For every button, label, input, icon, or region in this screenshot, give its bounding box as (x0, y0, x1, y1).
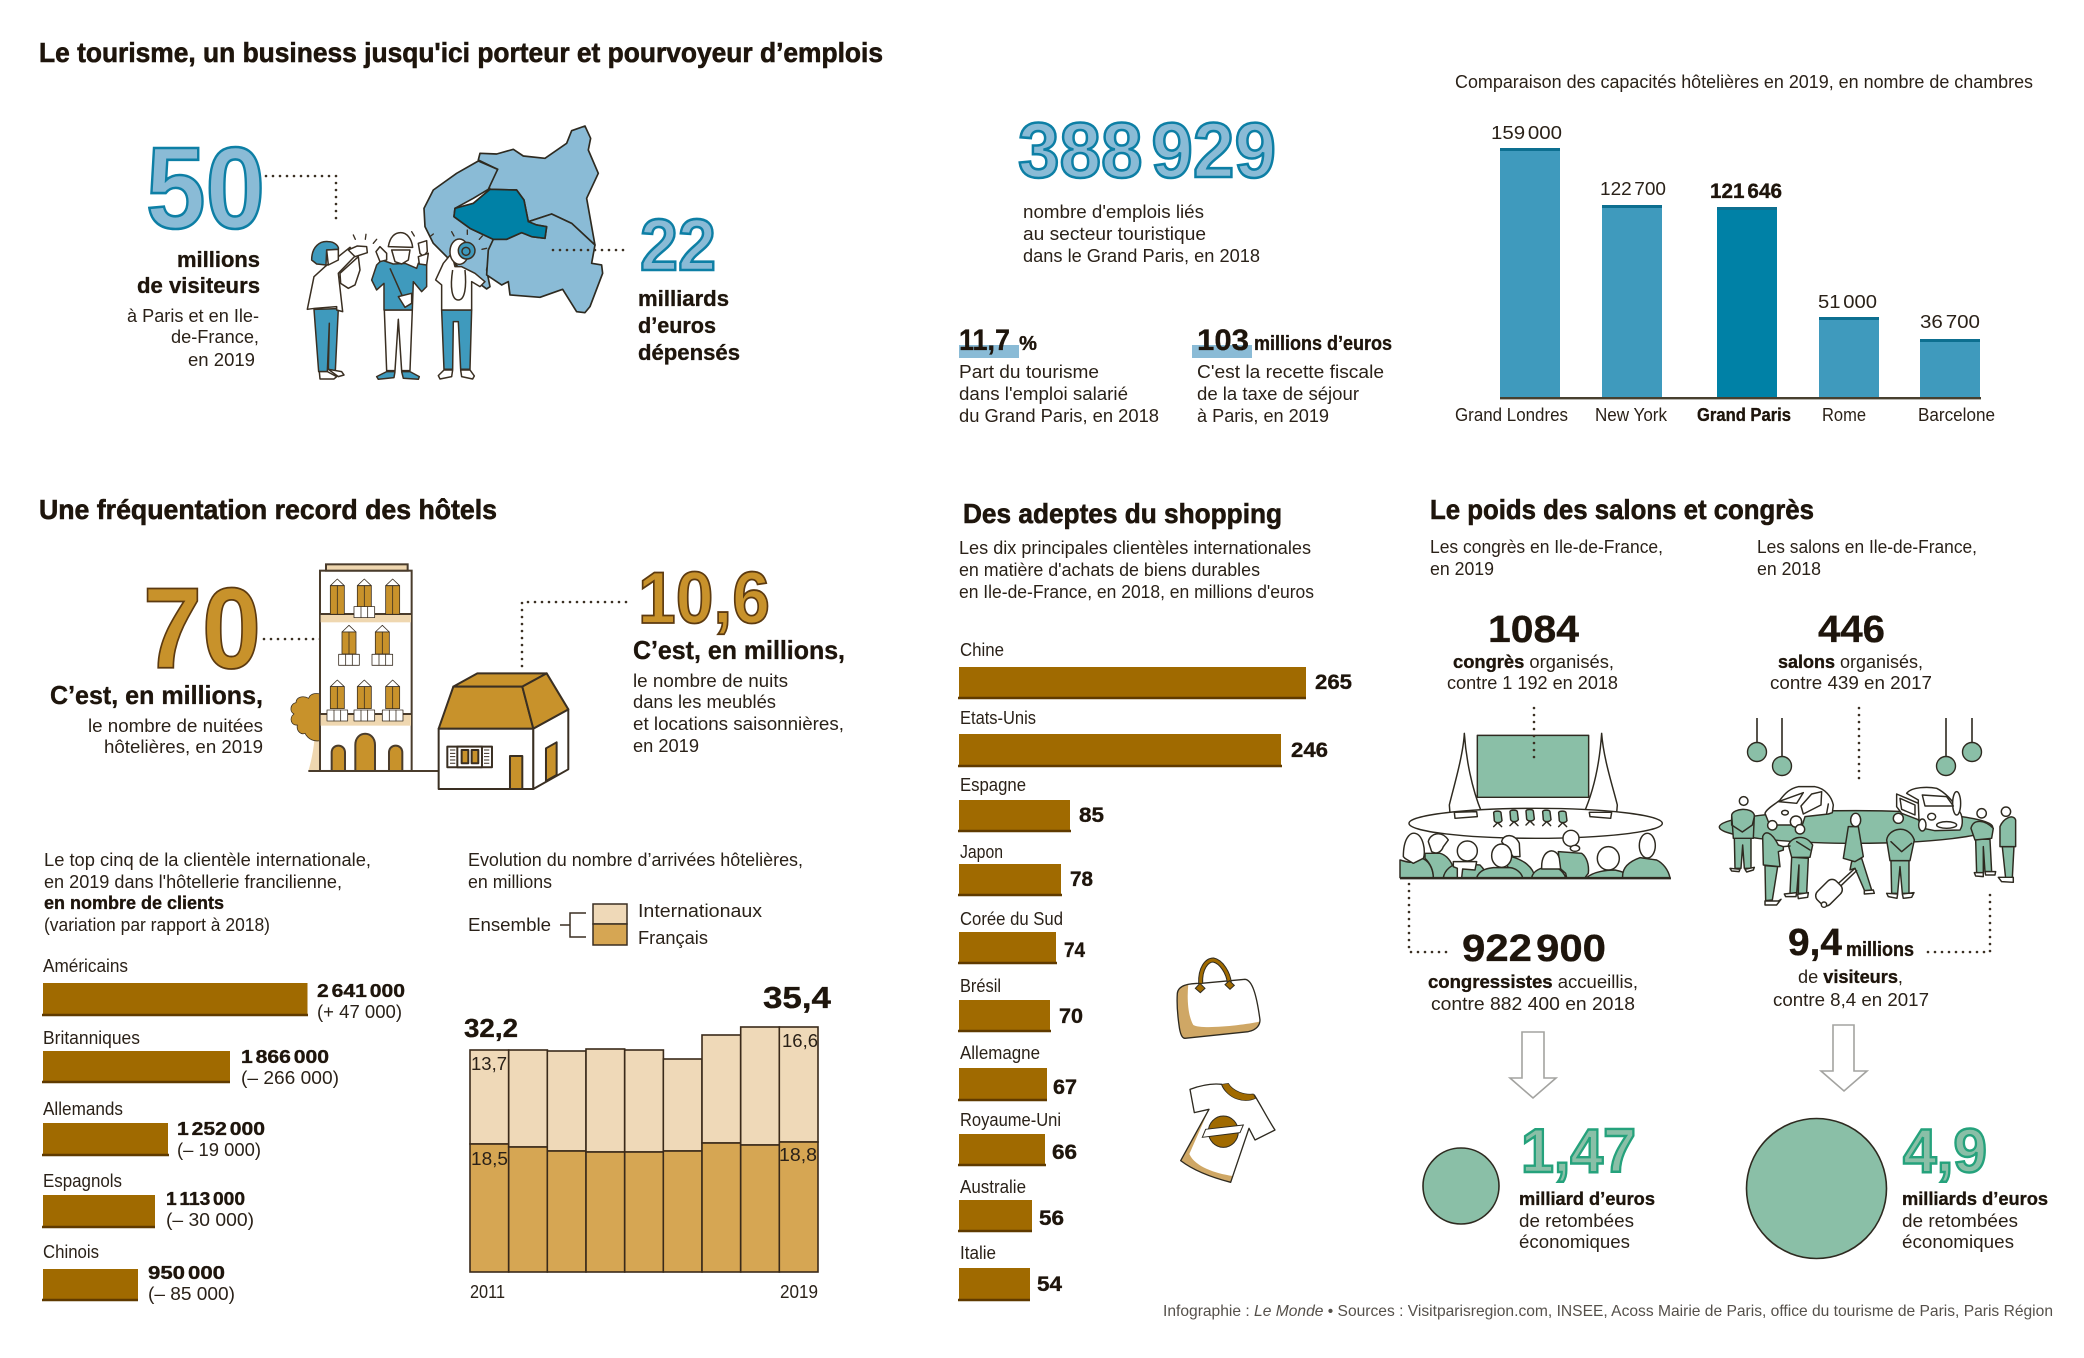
stat: 9,4 million visitors: millions (1846, 939, 1914, 961)
bar: Etats-Unis: Etats-Unis (960, 708, 1036, 728)
big number: 22: 22 (640, 205, 716, 286)
heading: shopping: Des adeptes du shopping (963, 498, 1282, 529)
text: nights in rentals: le nombre de nuits (633, 671, 788, 691)
bar: Espagne: 85 (1079, 804, 1104, 827)
chart totals and values: 13,7 (471, 1054, 507, 1074)
bar: Japon: 78 (1070, 868, 1093, 891)
chart heading (468, 850, 803, 892)
text: shopping intro (959, 538, 1314, 602)
heading: salons and congresses: Le poids des salons et congrès (1430, 494, 1814, 525)
panel: hotel nights (50, 558, 845, 789)
bar: Espagne: Espagne (960, 775, 1026, 795)
leader line to 22 (553, 249, 630, 251)
stat: 9,4 million visitors (1773, 922, 1929, 1010)
stat: 1084 congresses: 1084 (1488, 609, 1579, 651)
big number: 1,47: 1,47 (1521, 1117, 1636, 1186)
text: chart intro: en nombre de clients (44, 893, 224, 913)
illustration: three tourists (307, 230, 487, 379)
illustration: trade fair (1719, 787, 2016, 908)
chart heading: Evolution du nombre d’arrivées hôtelières, (468, 850, 803, 870)
text: nights in hotels (50, 680, 263, 757)
stat: 9,4 million visitors: de visiteurs, (1798, 967, 1903, 987)
bar values: 122 700 (1600, 179, 1666, 199)
stat: 11,7 %: 11,7 (959, 324, 1010, 357)
bar: Royaume-Uni (958, 1110, 1077, 1165)
panel: shopping (958, 498, 1352, 1300)
bar categories: Rome (1822, 405, 1866, 425)
text: shopping intro: en matière d'achats de biens durables (959, 560, 1260, 580)
stat: 103 millions d'euros: à Paris, en 2019 (1197, 406, 1329, 426)
title: Le tourisme, un business jusqu'ici porteur et pourvoyeur d’emplois (39, 37, 883, 68)
panel: visitors (127, 123, 740, 379)
arrow: fairs (1821, 1025, 1867, 1091)
text: millions de visiteurs: à Paris et en Ile- (127, 306, 259, 326)
stat: 9,4 million visitors: contre 8,4 en 2017 (1773, 990, 1929, 1010)
bar: Britanniques (42, 1028, 339, 1088)
icon: handbag (1177, 960, 1260, 1038)
text: congresses intro: Les congrès en Ile-de-France, (1430, 537, 1663, 557)
circle: fair impact (1746, 1118, 1886, 1258)
stat: 9,4 million visitors: 9,4 (1788, 922, 1842, 964)
stat: 103 millions d'euros: millions d’euros (1254, 333, 1392, 355)
bar: Espagnols (42, 1171, 254, 1230)
big number: 4,9: 4,9 (1903, 1117, 1987, 1186)
stacked bar chart (470, 1027, 818, 1272)
text: congress impact (1519, 1189, 1655, 1252)
big number: 70: 70 (143, 565, 261, 693)
text: congresses intro (1430, 537, 1663, 579)
stat: 103 millions d'euros: 103 (1197, 324, 1249, 357)
bar: Corée du Sud: Corée du Sud (960, 909, 1063, 929)
stat: 1084 congresses: contre 1 192 en 2018 (1447, 673, 1618, 693)
text: milliards d'euros dépensés: dépensés (638, 340, 740, 365)
illustration: hotel building (291, 564, 439, 771)
bar values (1491, 123, 1980, 332)
illustration: congress hall (1400, 733, 1671, 878)
bar: Australie (958, 1177, 1064, 1231)
bar: Allemagne (958, 1043, 1077, 1100)
bar values: 51 000 (1818, 292, 1877, 312)
stat: 1084 congresses (1447, 609, 1618, 693)
bar: Etats-Unis (958, 708, 1328, 766)
bar: Chinois: 950 000 (148, 1263, 225, 1283)
stat: 922 900 delegates: contre 882 400 en 2018 (1431, 994, 1635, 1014)
text: jobs description: dans le Grand Paris, en 2018 (1023, 246, 1260, 266)
text: milliards d'euros dépensés: milliards (638, 286, 729, 311)
bar values: 36 700 (1920, 312, 1980, 332)
leader line to house (522, 602, 626, 672)
bar: Britanniques: Britanniques (43, 1028, 140, 1048)
text: milliards d'euros dépensés (638, 286, 740, 365)
stat: 922 900 delegates (1428, 928, 1638, 1014)
text: chart intro (44, 850, 371, 935)
bar: Japon: Japon (960, 842, 1003, 862)
leader line from 50 (266, 176, 336, 222)
bar: Britanniques: (– 266 000) (241, 1068, 339, 1088)
bar: Américains (42, 956, 405, 1022)
text: chart intro: Le top cinq de la clientèle internationale, (44, 850, 371, 870)
bar: Chine: Chine (960, 640, 1004, 660)
stat: 922 900 delegates: 922 900 (1462, 928, 1606, 970)
text: fairs intro (1757, 537, 1977, 579)
bar: Brésil: 70 (1059, 1005, 1083, 1028)
stat: 446 fairs: 446 (1818, 609, 1885, 651)
bar: Australie: Australie (960, 1177, 1026, 1197)
bar categories: Grand Paris (1697, 405, 1791, 425)
chart totals and values: 2011 (470, 1282, 505, 1302)
bar: Italie: 54 (1037, 1273, 1062, 1296)
bar: Royaume-Uni: 66 (1052, 1141, 1077, 1164)
circle: congress impact (1423, 1148, 1499, 1224)
text: fairs intro: en 2018 (1757, 559, 1821, 579)
bar: Espagnols: 1 113 000 (166, 1189, 245, 1209)
leader line: 9,4 millions (1923, 895, 1990, 952)
bar: Italie: Italie (960, 1243, 996, 1263)
bar: Chine (958, 640, 1352, 698)
text: fair impact: économiques (1902, 1232, 2014, 1252)
legend: Français (638, 928, 708, 948)
chart totals and values: 32,2 (464, 1013, 518, 1043)
stat: 11,7 % (959, 324, 1159, 426)
bar: Japon (958, 842, 1093, 895)
bar: Américains: 2 641 000 (317, 981, 405, 1001)
chart totals and values: 16,6 (782, 1031, 818, 1051)
map of Ile-de-France (424, 126, 603, 313)
bar: Italie (958, 1243, 1062, 1300)
chart totals and values (464, 980, 832, 1302)
text: nights in rentals: C’est, en millions, (633, 635, 845, 665)
bar categories: Grand Londres (1455, 405, 1568, 425)
bar: Brésil: Brésil (960, 976, 1001, 996)
text: millions de visiteurs (127, 247, 260, 370)
bar: Etats-Unis: 246 (1291, 739, 1328, 762)
bar values: 121 646 (1710, 180, 1782, 203)
text: jobs description: nombre d'emplois liés (1023, 202, 1204, 222)
bar categories: Barcelone (1918, 405, 1995, 425)
text: congresses intro: en 2019 (1430, 559, 1494, 579)
stat: 446 fairs: contre 439 en 2017 (1770, 673, 1932, 693)
text: nights in rentals: dans les meublés (633, 692, 776, 712)
panel: hotel arrivals evolution (464, 850, 832, 1302)
bar: Corée du Sud: 74 (1064, 939, 1085, 962)
bar categories (1455, 405, 1995, 425)
heading: hotels: Une fréquentation record des hôtels (39, 494, 497, 525)
chart: hotel capacity comparison (1455, 72, 2033, 425)
stat: 11,7 %: dans l'emploi salarié (959, 384, 1128, 404)
text: millions de visiteurs: de visiteurs (137, 273, 260, 298)
leader line: 922 900 (1409, 884, 1448, 952)
text: jobs description: au secteur touristique (1023, 224, 1206, 244)
stat: 103 millions d'euros (1192, 324, 1392, 426)
text: congress impact: économiques (1519, 1232, 1630, 1252)
big number: 388 929: 388 929 (1018, 106, 1276, 194)
bar: Espagnols: Espagnols (43, 1171, 122, 1191)
legend: Ensemble (468, 915, 551, 935)
text: jobs description (1023, 202, 1260, 266)
stat: 1084 congresses: congrès organisés, (1453, 652, 1614, 672)
text: fair impact (1902, 1189, 2048, 1252)
bar: Allemands: (– 19 000) (177, 1140, 261, 1160)
chart totals and values: 18,8 (779, 1145, 817, 1165)
big number: 50 million visitors: 50 (146, 123, 265, 253)
chart totals and values: 2019 (780, 1282, 818, 1302)
text: fair impact: milliards d’euros (1902, 1189, 2048, 1209)
panel: jobs (959, 106, 1392, 426)
stat: 446 fairs (1770, 609, 1932, 693)
text: nights in rentals: en 2019 (633, 736, 699, 756)
stat: 11,7 %: du Grand Paris, en 2018 (959, 406, 1159, 426)
bar: Chine: 265 (1315, 671, 1352, 694)
text: milliards d'euros dépensés: d’euros (638, 313, 716, 338)
leader line: 446 (1858, 708, 1860, 785)
stat: 446 fairs: salons organisés, (1778, 652, 1923, 672)
leader line from 70 (264, 638, 329, 640)
bar: Américains: Américains (43, 956, 128, 976)
bar: Royaume-Uni: Royaume-Uni (960, 1110, 1061, 1130)
text: millions de visiteurs: de-France, (171, 327, 259, 347)
chart title: Comparaison des capacités hôtelières en 2019, en nombre de chambres (1455, 72, 2033, 92)
text: nights in hotels: C’est, en millions, (50, 680, 263, 710)
bar categories: New York (1595, 405, 1668, 425)
text: shopping intro: Les dix principales clientèles internationales (959, 538, 1311, 558)
text: nights in rentals: et locations saisonnières, (633, 714, 844, 734)
text: nights in hotels: hôtelières, en 2019 (104, 737, 263, 757)
text: shopping intro: en Ile-de-France, en 2018, en millions d'euros (959, 582, 1314, 602)
text: nights in hotels: le nombre de nuitées (88, 716, 263, 736)
bar values: 159 000 (1491, 123, 1562, 143)
bar: Australie: 56 (1039, 1207, 1064, 1230)
text: chart intro: (variation par rapport à 2018) (44, 915, 270, 935)
stat: 11,7 %: % (1019, 333, 1037, 355)
illustration: rental house (439, 673, 568, 789)
bar: Américains: (+ 47 000) (317, 1002, 402, 1022)
bar: Corée du Sud (958, 909, 1085, 963)
bar: Espagne (958, 775, 1104, 831)
text: congress impact: de retombées (1519, 1211, 1634, 1231)
stat: 11,7 %: Part du tourisme (959, 362, 1099, 382)
bar: Brésil (958, 976, 1083, 1031)
bar: Allemagne: Allemagne (960, 1043, 1040, 1063)
bar: Britanniques: 1 866 000 (241, 1047, 329, 1067)
bar: Allemands (42, 1099, 265, 1160)
panel: congresses (1400, 537, 1671, 1252)
stat: 103 millions d'euros: C'est la recette fiscale (1197, 362, 1384, 382)
bar: Allemands: 1 252 000 (177, 1119, 265, 1139)
chart totals and values: 35,4 (763, 980, 832, 1015)
bar: Chinois: (– 85 000) (148, 1284, 235, 1304)
bar: Allemands: Allemands (43, 1099, 123, 1119)
icon: t-shirt (1181, 1083, 1275, 1182)
text: chart intro: en 2019 dans l'hôtellerie francilienne, (44, 872, 342, 892)
panel: trade fairs (1719, 537, 2048, 1258)
bars (1500, 148, 1981, 399)
stat: 922 900 delegates: congressistes accueillis, (1428, 972, 1638, 992)
arrow: congresses (1510, 1032, 1556, 1098)
text: congress impact: milliard d’euros (1519, 1189, 1655, 1209)
big number: 10,6: 10,6 (638, 558, 770, 639)
chart heading: en millions (468, 872, 552, 892)
bar: Allemagne: 67 (1053, 1076, 1077, 1099)
illustration: hanging lamps (1748, 718, 1982, 776)
stat: 103 millions d'euros: de la taxe de séjour (1197, 384, 1359, 404)
bar: Chinois (42, 1242, 235, 1304)
bar: Chinois: Chinois (43, 1242, 99, 1262)
text: fairs intro: Les salons en Ile-de-France, (1757, 537, 1977, 557)
text: nights in rentals (633, 635, 845, 756)
text: millions de visiteurs: millions (177, 247, 260, 272)
leader line: 1084 (1533, 708, 1535, 758)
panel: top five international clients (42, 850, 405, 1304)
text: fair impact: de retombées (1902, 1211, 2018, 1231)
chart totals and values: 18,5 (471, 1149, 508, 1169)
legend (468, 901, 762, 948)
bar: Espagnols: (– 30 000) (166, 1210, 254, 1230)
legend: Internationaux (638, 901, 762, 921)
footer: credits and sources: Infographie : Le Monde • Sources : Visitparisregion.com, INSEE, Acoss Mairie de Paris, office du tourisme de Paris, Paris Région (1163, 1303, 2053, 1320)
text: millions de visiteurs: en 2019 (188, 350, 255, 370)
